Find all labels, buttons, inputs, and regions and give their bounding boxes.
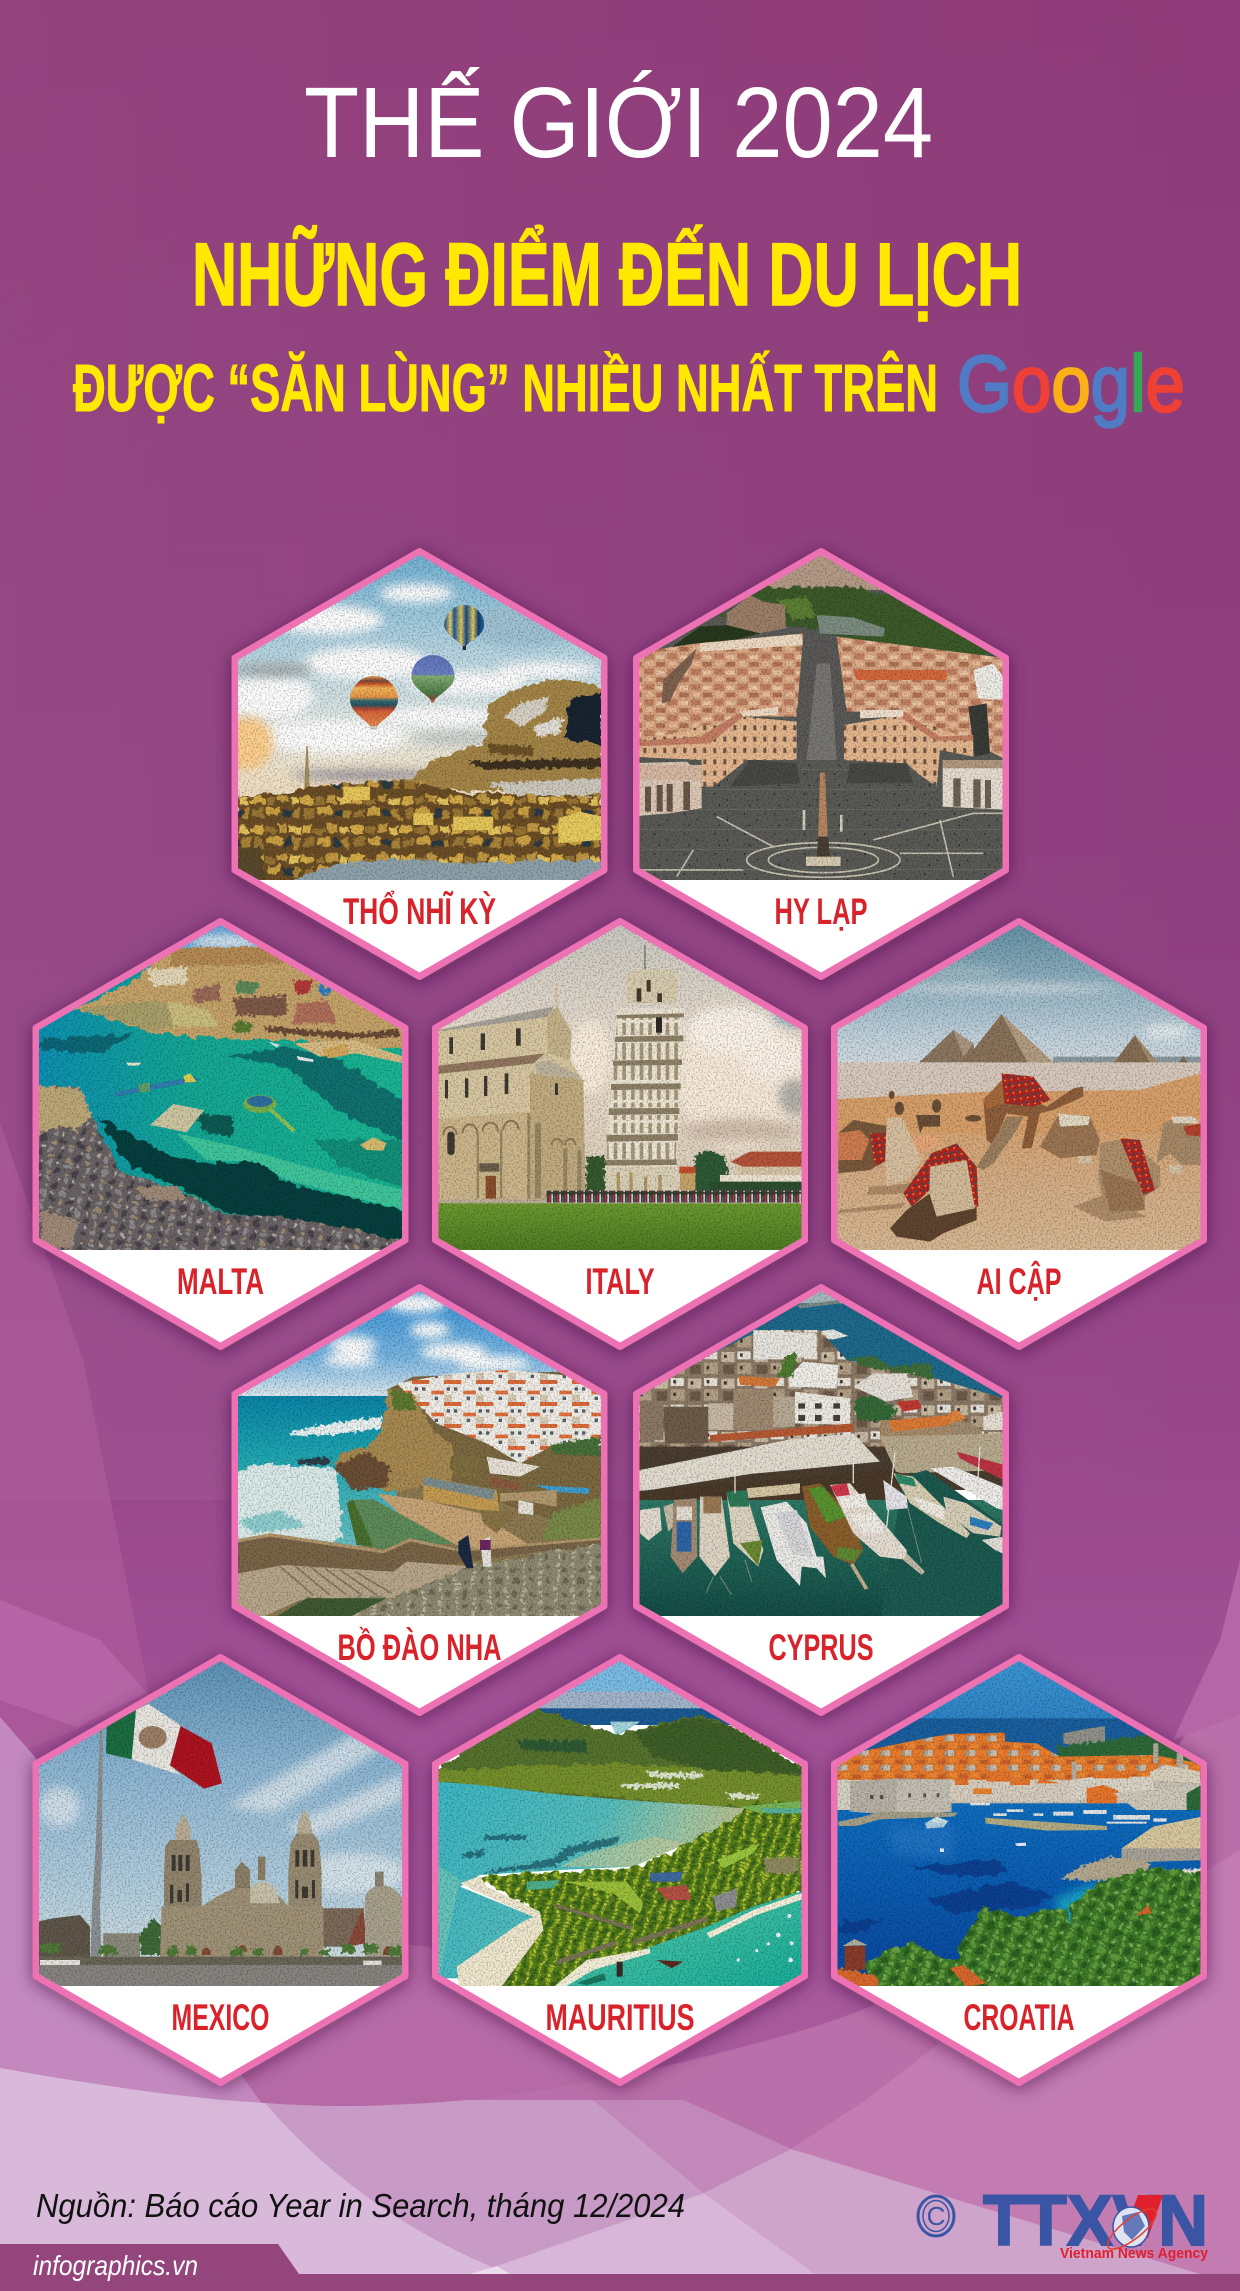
label: HY LẠP xyxy=(774,891,868,932)
panel: Malta xyxy=(30,917,410,1346)
panel: Hy Lạp xyxy=(630,547,1010,976)
label: MAURITIUS xyxy=(546,1997,694,2038)
panel: Ai Cập xyxy=(830,917,1210,1346)
photo: city square with obelisk xyxy=(630,547,1010,883)
source note: Nguồn: Báo cáo Year in Search, tháng 12/2024 xyxy=(36,2187,685,2224)
photo: lagoon and island xyxy=(430,1653,810,1993)
photo: leaning tower and cathedral xyxy=(430,917,813,1253)
panel: Italy xyxy=(430,917,813,1346)
photo: marina with boats xyxy=(630,1283,1010,1623)
panel: Thổ Nhĩ Kỳ xyxy=(220,547,608,976)
logo: TTXVN: Vietnam News Agency xyxy=(1060,2245,1209,2262)
photo: Cappadocia balloons xyxy=(220,547,608,883)
logo: Google: Google xyxy=(957,339,1185,428)
panel: Bồ Đào Nha xyxy=(230,1283,610,1712)
panel: Croatia xyxy=(830,1653,1210,2082)
copyright symbol xyxy=(918,2196,954,2236)
label: BỒ ĐÀO NHA xyxy=(338,1626,502,1668)
panel: Mauritius xyxy=(430,1653,810,2082)
photo: cathedral and flag xyxy=(30,1653,410,1993)
panel: Mexico xyxy=(30,1653,410,2082)
label: CYPRUS xyxy=(768,1627,874,1668)
label: ITALY xyxy=(586,1261,655,1302)
website: infographics.vn xyxy=(33,2250,198,2281)
label: MALTA xyxy=(177,1261,264,1302)
label: THỔ NHĨ KỲ xyxy=(343,889,496,932)
label: AI CẬP xyxy=(976,1260,1062,1302)
title: THẾ GIỚI 2024 xyxy=(304,67,933,179)
photo: turquoise bay with village xyxy=(30,917,410,1253)
photo: pyramids and camels xyxy=(830,917,1210,1253)
panel: Cyprus xyxy=(630,1283,1010,1712)
photo: coastal cliff town xyxy=(230,1283,610,1623)
photo: old town harbour xyxy=(830,1653,1210,1993)
footer band and tab xyxy=(0,2244,1240,2291)
copyright symbol: C xyxy=(927,2201,945,2231)
label: CROATIA xyxy=(964,1997,1074,2038)
label: MEXICO xyxy=(172,1997,270,2038)
logo: TTXVN: TTXVN xyxy=(983,2182,1208,2261)
